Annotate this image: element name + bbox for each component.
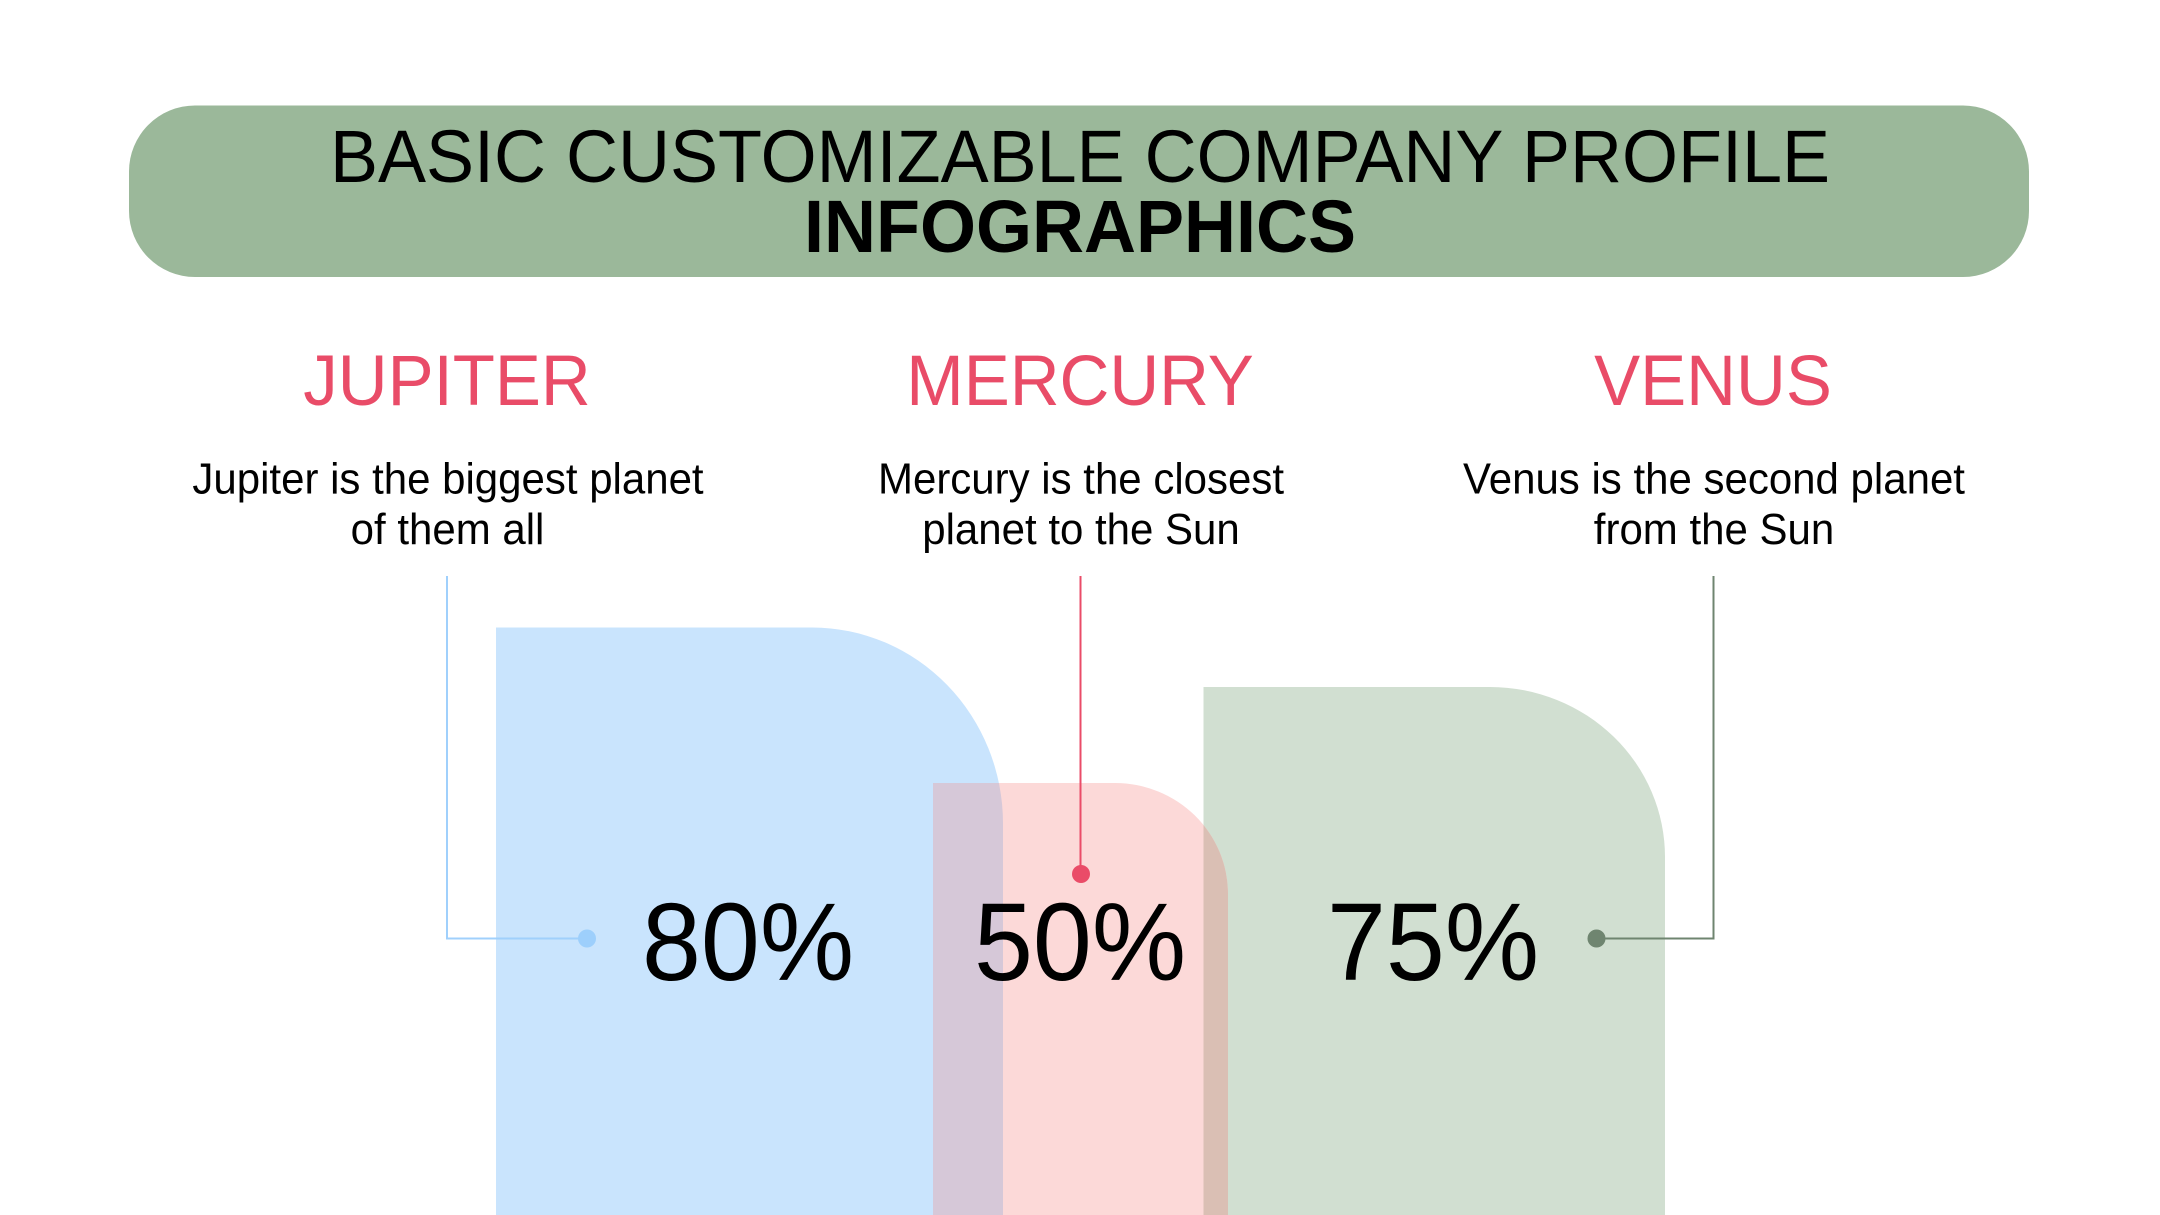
column: Mercury heading and description <box>878 341 1284 554</box>
column: Jupiter heading and description: Jupiter is the biggest planet <box>192 455 704 504</box>
bar: Venus 75% <box>1204 687 1665 1215</box>
title text: INFOGRAPHICS <box>804 186 1356 268</box>
title banner <box>129 106 2029 277</box>
value: 80%: 80% <box>642 880 854 1003</box>
column: Mercury heading and description: MERCURY <box>906 341 1254 420</box>
title text: BASIC CUSTOMIZABLE COMPANY PROFILE <box>330 116 1830 198</box>
connector: Mercury <box>1072 576 1090 883</box>
column: Venus heading and description: from the Sun <box>1594 505 1834 554</box>
value: 75%: 75% <box>1327 880 1539 1003</box>
title text <box>330 116 1830 268</box>
bar: Jupiter 80% <box>496 628 1003 1215</box>
column: Venus heading and description: Venus is the second planet <box>1463 455 1965 504</box>
overlap: Mercury and Jupiter <box>933 783 1003 1215</box>
column: Venus heading and description: VENUS <box>1594 341 1832 420</box>
connector: Venus <box>1588 576 1714 948</box>
column: Mercury heading and description: Mercury is the closest <box>878 455 1284 504</box>
value: 50%: 50% <box>974 880 1186 1003</box>
column: Jupiter heading and description: JUPITER <box>303 341 591 420</box>
column: Jupiter heading and description: of them all <box>351 505 544 554</box>
column: Venus heading and description <box>1463 341 1965 554</box>
bar: Mercury 50% <box>933 783 1228 1215</box>
column: Mercury heading and description: planet to the Sun <box>922 505 1240 554</box>
overlap: Mercury and Venus <box>1204 825 1228 1215</box>
overlapping bar chart <box>496 628 1665 1215</box>
column: Jupiter heading and description <box>192 341 704 554</box>
connector: Jupiter <box>447 576 596 948</box>
